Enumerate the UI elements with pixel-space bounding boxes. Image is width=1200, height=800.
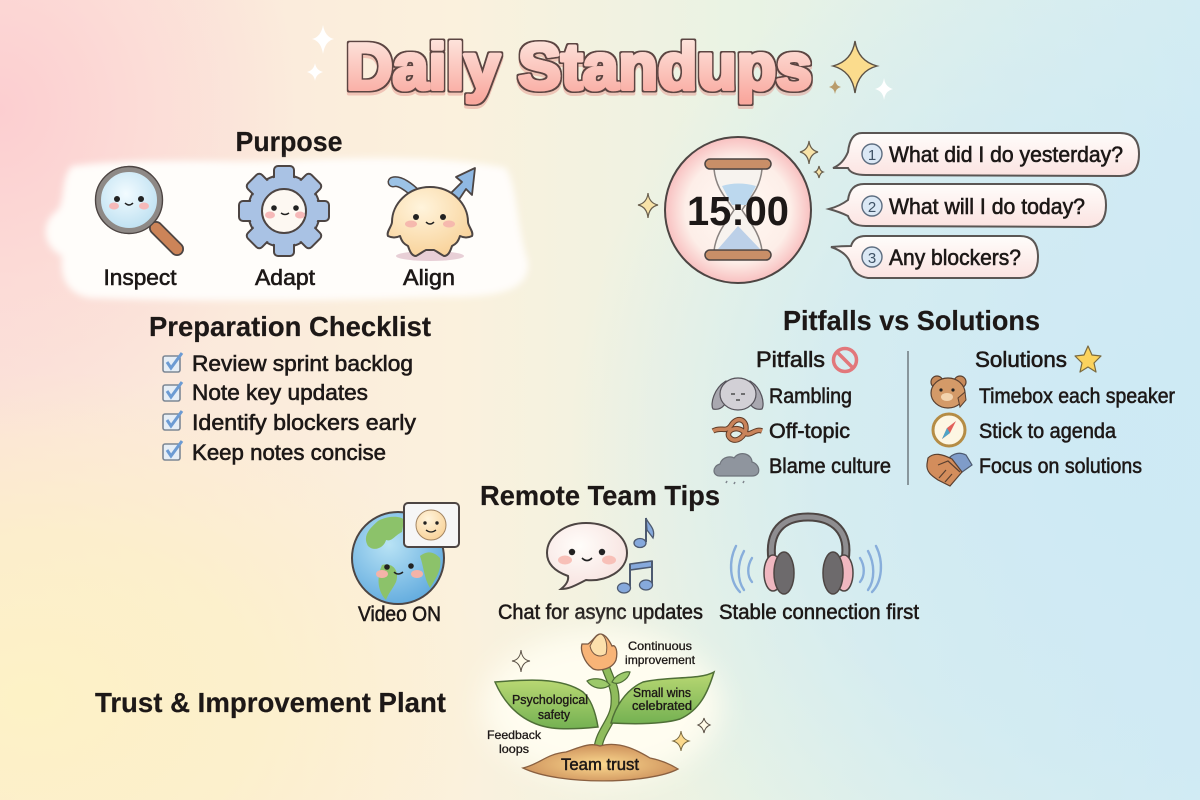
icon: magnifying glass bbox=[96, 166, 177, 249]
label: team trust: Team trust bbox=[561, 755, 639, 774]
small leaves bbox=[587, 679, 610, 688]
label: inspect: Inspect bbox=[104, 265, 176, 290]
label: align: Align bbox=[403, 265, 455, 290]
icon: prohibited bbox=[834, 348, 856, 372]
icon: chat bubble with notes bbox=[547, 518, 654, 593]
left leaf bbox=[495, 680, 598, 729]
icon: timer clock bbox=[665, 137, 811, 283]
label: psychological safety: Psychological bbox=[512, 693, 588, 707]
icon: bear bbox=[931, 376, 966, 408]
icon: align blob with arrow bbox=[388, 168, 475, 261]
icon: handshake bbox=[927, 453, 972, 486]
heading: pitfalls vs solutions: Pitfalls vs Solutions bbox=[783, 305, 1040, 336]
panel: plant glow bbox=[484, 632, 720, 780]
label: small wins celebrated: celebrated bbox=[632, 699, 692, 713]
heading: preparation checklist: Preparation Checklist bbox=[149, 311, 431, 342]
label: psychological safety: safety bbox=[538, 708, 571, 722]
item: identify blockers early: Identify blockers early bbox=[192, 410, 416, 435]
label: rambling: Rambling bbox=[769, 385, 852, 408]
icon: clock sparkles bbox=[638, 141, 823, 218]
icon: knot bbox=[713, 420, 762, 440]
heading: purpose: Purpose bbox=[236, 126, 342, 157]
bubble: question 1 bbox=[833, 133, 1139, 176]
label: video on: Video ON bbox=[358, 603, 441, 626]
sparkles bbox=[512, 650, 710, 751]
icon: rain cloud bbox=[714, 454, 759, 484]
bubble: question 2: What will I do today? bbox=[889, 194, 1085, 219]
label: off-topic: Off-topic bbox=[769, 420, 850, 443]
bubble: question 2 bbox=[829, 184, 1106, 227]
heading: remote team tips: Remote Team Tips bbox=[480, 480, 720, 511]
label: feedback loops: loops bbox=[499, 742, 529, 756]
icon: check 2 bbox=[163, 382, 182, 401]
label: feedback loops: Feedback bbox=[487, 728, 542, 742]
label: focus on solutions: Focus on solutions bbox=[979, 455, 1142, 478]
icon: globe with video card bbox=[352, 503, 459, 604]
timer value: 15:00 bbox=[687, 188, 789, 234]
divider bbox=[907, 351, 909, 485]
bubble: question 2: 2 bbox=[868, 199, 876, 216]
illustration: trust and improvement plant bbox=[495, 634, 714, 781]
soil mound bbox=[523, 744, 678, 781]
label: small wins celebrated bbox=[632, 686, 692, 713]
label: continuous improvement: Continuous bbox=[628, 639, 692, 653]
label: small wins celebrated: Small wins bbox=[633, 686, 691, 700]
subheading: pitfalls: Pitfalls bbox=[756, 347, 825, 372]
stem bbox=[598, 668, 615, 748]
label: timebox each speaker: Timebox each speaker bbox=[979, 385, 1175, 408]
icon: headphones bbox=[731, 517, 881, 594]
icon: check 3 bbox=[163, 411, 182, 430]
label: continuous improvement: improvement bbox=[625, 653, 696, 667]
heading: trust and improvement plant: Trust & Improvement Plant bbox=[95, 687, 446, 718]
icon: compass bbox=[933, 414, 965, 446]
label: feedback loops bbox=[487, 728, 542, 756]
label: chat for async updates: Chat for async updates bbox=[498, 601, 703, 624]
subheading: solutions: Solutions bbox=[975, 347, 1067, 372]
panel: purpose background bbox=[46, 158, 528, 301]
icon: check 4 bbox=[163, 441, 182, 460]
label: blame culture: Blame culture bbox=[769, 455, 891, 478]
right leaf bbox=[611, 672, 714, 724]
item: review sprint backlog: Review sprint backlog bbox=[192, 351, 413, 376]
bubble: question 3 bbox=[831, 236, 1038, 278]
label: stable connection first: Stable connection first bbox=[719, 601, 919, 624]
label: continuous improvement bbox=[625, 639, 696, 667]
checklist bbox=[163, 351, 416, 465]
bubble: question 1: What did I do yesterday? bbox=[889, 142, 1123, 167]
label: adapt: Adapt bbox=[255, 265, 315, 290]
item: note key updates: Note key updates bbox=[192, 380, 368, 405]
icon: title sparkles bbox=[307, 25, 893, 100]
flower bbox=[581, 634, 617, 670]
bubble: question 3: 3 bbox=[868, 250, 876, 267]
item: keep notes concise: Keep notes concise bbox=[192, 440, 386, 465]
title: Daily Standups bbox=[346, 30, 812, 103]
label: stick to agenda: Stick to agenda bbox=[979, 420, 1116, 443]
bubble: question 1: 1 bbox=[868, 147, 876, 164]
icon: gear bbox=[239, 166, 329, 256]
label: psychological safety bbox=[512, 693, 588, 722]
icon: check 1 bbox=[163, 353, 182, 372]
icon: bunny bbox=[712, 378, 763, 410]
bubble: question 3: Any blockers? bbox=[889, 245, 1021, 270]
icon: star bbox=[1075, 346, 1101, 372]
